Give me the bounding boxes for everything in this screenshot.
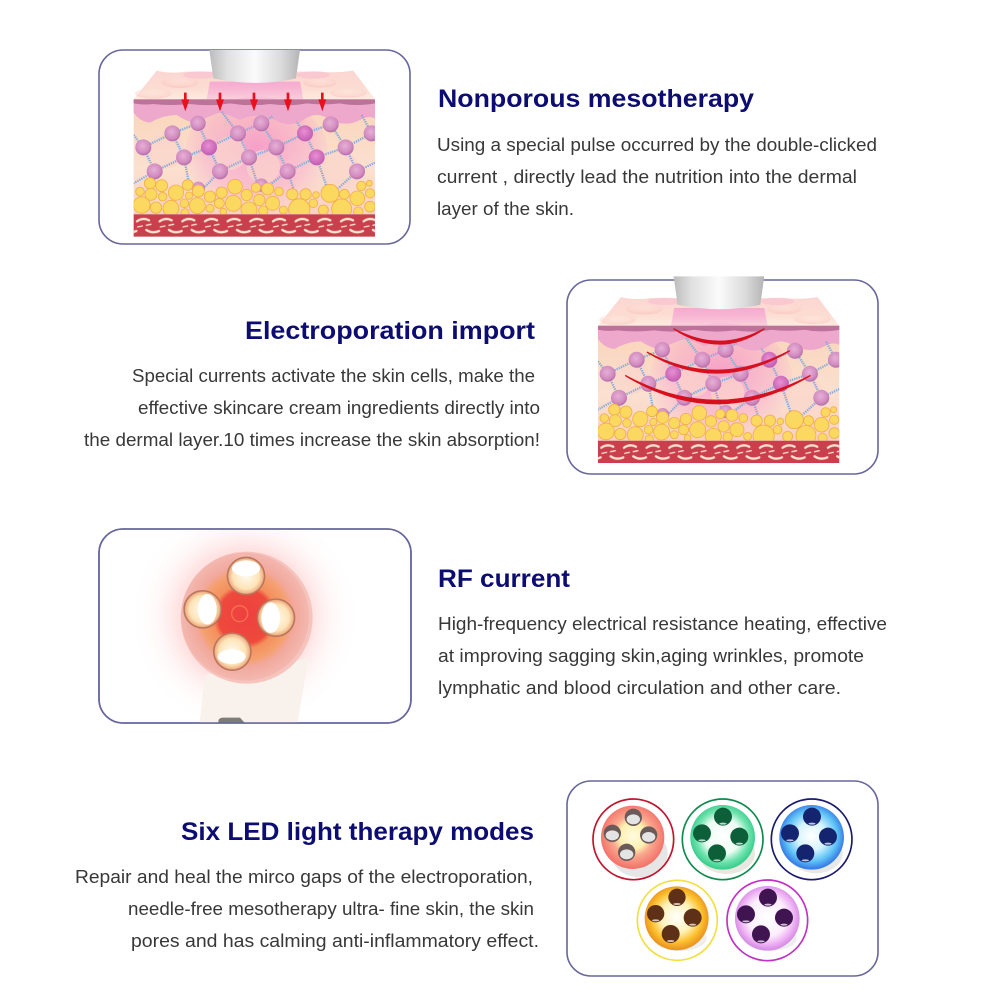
panel: LED light modes: [567, 781, 878, 976]
text block: electroporation description: Special currents activate the skin cells, make the: [132, 365, 535, 386]
heading: Electroporation import: Electroporation import: [245, 317, 536, 345]
text block: electroporation description: the dermal layer.10 times increase the skin absorption!: [84, 429, 540, 450]
text block: LED description: needle-free mesotherapy ultra- fine skin, the skin: [128, 898, 534, 919]
heading: RF current: RF current: [438, 565, 571, 593]
panel: nonporous mesotherapy illustration: [99, 50, 410, 244]
text block: electroporation description: effective skincare cream ingredients directly into: [138, 397, 540, 418]
text block: electroporation description: [84, 365, 540, 450]
heading: Nonporous mesotherapy: Nonporous mesotherapy: [438, 85, 754, 113]
text block: LED description: [75, 866, 539, 951]
icon: red current arcs: [626, 329, 810, 404]
text block: RF description: [438, 613, 887, 698]
electrodes: [184, 557, 295, 670]
text block: LED description: pores and has calming anti-inflammatory effect.: [131, 930, 539, 951]
text block: nonporous description: current , directly lead the nutrition into the dermal: [437, 166, 857, 187]
icon: blue LED mode: [771, 799, 852, 880]
device handle: [199, 658, 308, 725]
text block: RF description: High-frequency electrical resistance heating, effective: [438, 613, 887, 634]
text block: nonporous description: layer of the skin.: [437, 198, 574, 219]
text block: LED description: Repair and heal the mirco gaps of the electroporation,: [75, 866, 533, 887]
icon: red downward arrows: [181, 93, 326, 111]
panel: RF current device photo: [98, 528, 412, 724]
text block: nonporous description: Using a special pulse occurred by the double-clicked: [437, 134, 877, 155]
panel: electroporation illustration: [567, 276, 878, 474]
text block: RF description: lymphatic and blood circulation and other care.: [438, 677, 841, 698]
icon: purple LED mode: [727, 880, 808, 961]
heading: Six LED light therapy modes: Six LED light therapy modes: [181, 818, 534, 846]
icon: red LED mode: [593, 799, 674, 880]
text block: nonporous description: [437, 134, 877, 219]
device head: [181, 552, 313, 684]
text block: RF description: at improving sagging skin,aging wrinkles, promote: [438, 645, 864, 666]
icon: yellow LED mode: [637, 880, 717, 960]
icon: green LED mode: [682, 799, 763, 880]
